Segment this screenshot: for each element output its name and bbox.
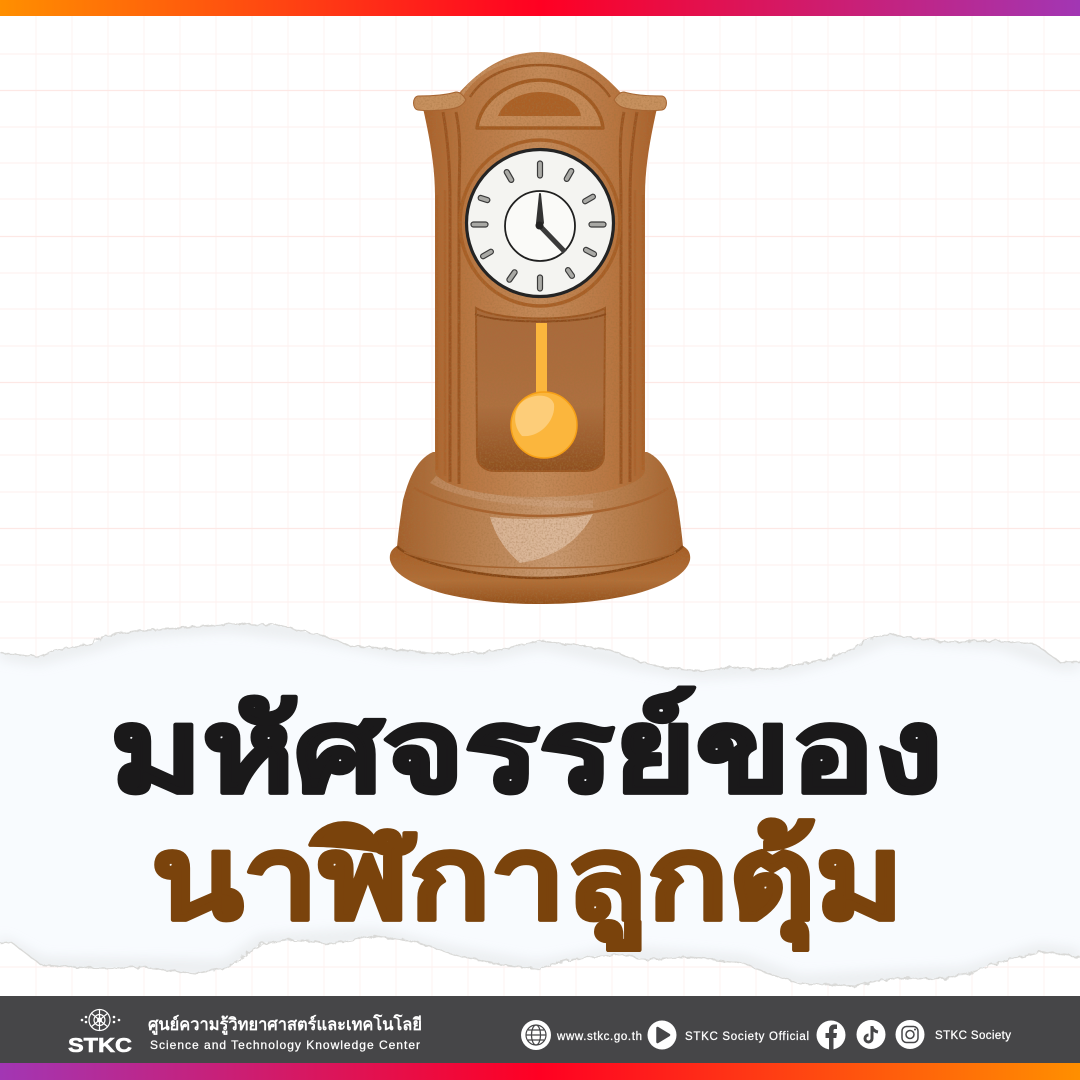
clock face <box>466 150 614 296</box>
Instagram label: STKC Society <box>935 1030 1011 1042</box>
logo: STKC <box>68 1009 132 1057</box>
cornice right <box>614 92 666 111</box>
footer organisation name: Science and Technology Knowledge Center <box>150 1038 420 1052</box>
icon: facebook <box>816 1020 846 1050</box>
pendulum <box>511 323 577 458</box>
clock case <box>414 52 666 497</box>
icon: globe <box>521 1020 551 1050</box>
icon: play <box>648 1020 676 1050</box>
footer bar <box>0 996 1080 1063</box>
bottom gradient bar <box>0 1063 1080 1080</box>
cornice left <box>414 92 466 111</box>
footer organisation name <box>148 1014 422 1052</box>
footer organisation name: ศูนย์ความรู้วิทยาศาสตร์และเทคโนโลยี <box>148 1014 422 1036</box>
top gradient bar <box>0 0 1080 16</box>
title line 1: มหัศจรรย์ของ <box>110 686 942 816</box>
logo: STKC: STKC <box>68 1035 132 1057</box>
website label: www.stkc.go.th <box>556 1031 642 1043</box>
icon: tiktok <box>856 1020 886 1049</box>
YouTube label: STKC Society Official <box>685 1031 809 1043</box>
clock base <box>390 452 690 604</box>
illustration: pendulum clock <box>390 52 690 604</box>
title line 2: นาฬิกาลูกตุ้ม <box>152 813 904 950</box>
pendulum panel <box>476 308 605 471</box>
icon: instagram <box>896 1020 924 1049</box>
torn paper panel <box>0 624 1080 986</box>
